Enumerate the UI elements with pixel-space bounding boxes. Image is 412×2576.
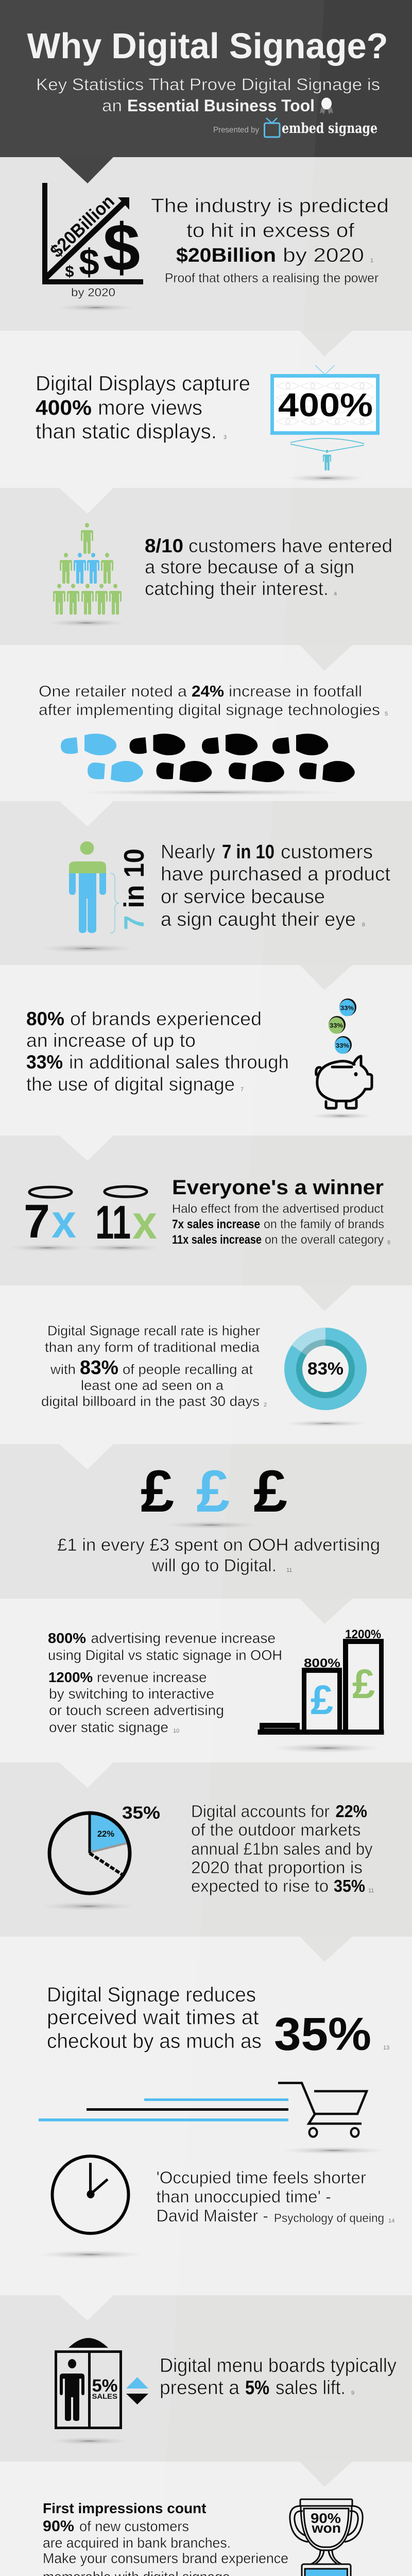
icon: trophy 90 percent won: [290, 2499, 363, 2576]
stat text: or touch screen advertising: [49, 1702, 224, 1718]
icon: 7x with halo: [24, 1187, 76, 1248]
footnote: 6: [362, 922, 365, 928]
icon: people pyramid: [53, 523, 122, 615]
icon: speeding shopping cart: [39, 2083, 367, 2137]
stat text: the use of digital signage: [26, 1074, 235, 1095]
stat text: 5%: [245, 2377, 269, 2399]
icon: 11x with halo: x: [132, 1196, 157, 1249]
icon: three pound signs: [141, 1459, 287, 1524]
bar chart: revenue increase: [258, 1628, 384, 1735]
stat text: with: [50, 1362, 76, 1377]
icon: three pound signs: £: [253, 1459, 287, 1524]
stat text: 83%: [80, 1357, 118, 1379]
forecast text: $20Billion: [176, 245, 276, 266]
halo text: 7x sales increase: [172, 1217, 260, 1231]
stat text: Digital Signage reduces: [47, 1984, 256, 2006]
stat text: or service because: [161, 886, 325, 908]
bar chart: revenue increase: £: [352, 1661, 375, 1707]
panel: 7 in 10 customers: [0, 801, 412, 965]
stat text: have purchased a product: [161, 863, 390, 885]
stat text: 8/10: [145, 535, 183, 556]
stat text: sales lift.: [276, 2377, 346, 2399]
icon: 7x with halo: 7: [24, 1195, 50, 1248]
panel: advertising revenue: [0, 1599, 412, 1762]
footnote: 14: [388, 2218, 394, 2224]
footnote: 9: [351, 2390, 354, 2396]
footnote: 11: [368, 1888, 374, 1894]
subtitle: an: [102, 96, 122, 115]
subtitle: Key Statistics That Prove Digital Signage is: [36, 75, 380, 94]
icon: coins: 33%: [340, 1005, 354, 1012]
forecast text: by 2020: [283, 245, 364, 266]
stat text: 2020 that proportion is: [191, 1858, 363, 1877]
bar chart: revenue increase: 1200%: [345, 1628, 381, 1641]
panel: header: [0, 0, 412, 157]
footnote: 4: [334, 591, 337, 597]
footnote: 13: [383, 2045, 389, 2051]
icon: screen with eyes: [270, 365, 380, 435]
heading: Everyone's a winner: [172, 1176, 384, 1199]
icon: trophy 90 percent won: 90%: [311, 2511, 341, 2526]
stat text: Nearly: [161, 841, 215, 863]
panel: menu boards: [0, 2295, 412, 2462]
stat text: Digital accounts for: [191, 1802, 330, 1821]
panel: 8 of 10 customers: [0, 488, 412, 645]
footnote: 7: [241, 1087, 244, 1093]
stat text: of brands experienced: [70, 1008, 262, 1029]
stat text: increase in footfall: [229, 682, 362, 700]
icon: three pound signs: £: [141, 1459, 174, 1524]
icon: growth chart with dollars: $: [65, 262, 74, 280]
panel: recall rate: [0, 1285, 412, 1444]
panel: 400 percent views: [0, 331, 412, 488]
quote: David Maister -: [157, 2206, 268, 2225]
stat text: 1200%: [48, 1669, 93, 1685]
icon: 7x with halo: x: [52, 1195, 76, 1248]
quote: 'Occupied time feels shorter: [157, 2168, 366, 2187]
halo text: on the overall category: [265, 1233, 384, 1247]
stat text: an increase of up to: [26, 1030, 196, 1051]
icon: lift with 5 percent: [56, 2338, 148, 2428]
stat text: by switching to interactive: [49, 1686, 214, 1702]
stat text: customers have entered: [188, 535, 392, 556]
stat text: least one ad seen on a: [81, 1378, 224, 1393]
footnote: 11: [286, 1567, 292, 1573]
stat text: perceived wait times at: [47, 2006, 259, 2029]
stat text: Digital Signage recall rate is higher: [47, 1323, 260, 1338]
stat text: 22%: [336, 1802, 367, 1821]
stat text: of new customers: [79, 2518, 189, 2534]
panel: outdoor market share: [0, 1762, 412, 1937]
icon: viewer sightlines: [290, 438, 364, 470]
stat text: Digital Displays capture: [36, 371, 250, 395]
icon: award ribbon: [320, 98, 333, 114]
icon: growth chart with dollars: $: [79, 242, 99, 283]
stat text: 33%: [26, 1052, 63, 1073]
stat text: present a: [160, 2377, 240, 2399]
stat text: 400%: [36, 396, 92, 419]
subtitle: Essential Business Tool: [127, 96, 315, 115]
icon: piggy bank: [316, 1056, 372, 1108]
stat text: customers: [281, 841, 373, 863]
quote: than unoccupied time' -: [157, 2187, 331, 2206]
stat text: 800%: [48, 1630, 86, 1646]
presented by: Presented by: [213, 126, 259, 134]
stat text: £1 in every £3 spent on OOH advertising: [57, 1535, 380, 1555]
stat text: revenue increase: [97, 1669, 207, 1685]
stat text: a sign caught their eye: [161, 909, 356, 930]
stat text: over static signage: [49, 1719, 168, 1735]
panel: footfall: [0, 645, 412, 801]
bar chart: revenue increase: 800%: [304, 1656, 340, 1670]
icon: three pound signs: £: [196, 1459, 230, 1524]
vertical 7 in 10 label: 7 in 10: [118, 849, 150, 930]
icon: 11x with halo: 11: [95, 1196, 131, 1249]
supporting line: Proof that others a realising the power: [165, 271, 379, 285]
stat text: Digital menu boards typically: [160, 2355, 397, 2377]
stat text: catching their interest.: [145, 578, 329, 599]
donut chart: 83 percent: 83%: [307, 1359, 344, 1379]
footnote: 1: [370, 258, 373, 264]
stat text: digital billboard in the past 30 days: [41, 1394, 260, 1409]
stat text: in additional sales through: [69, 1052, 289, 1073]
stat text: will go to Digital.: [151, 1556, 277, 1575]
logo wordmark: embed signage: [282, 121, 377, 137]
panel: halo effect: [0, 1136, 412, 1285]
icon: embed signage tv logo: [265, 118, 280, 137]
icon: lift with 5 percent: SALES: [92, 2392, 117, 2400]
stat text: after implementing digital signage technologies: [39, 701, 380, 719]
icon: clock: [53, 2156, 129, 2233]
stat text: checkout by as much as: [47, 2030, 262, 2053]
stat text: annual £1bn sales and by: [191, 1839, 373, 1858]
stat text: 24%: [192, 682, 224, 700]
stat text: using Digital vs static signage in OOH: [48, 1647, 282, 1663]
icon: growth chart with dollars: $: [103, 210, 140, 285]
icon: growth chart with dollars: $20Billion: [46, 191, 118, 262]
footnote: 2: [264, 1402, 267, 1408]
stat text: than static displays.: [36, 419, 217, 443]
halo text: on the family of brands: [264, 1217, 384, 1231]
bar chart: revenue increase: £: [311, 1677, 333, 1723]
pie chart: 22 to 35 percent: 22%: [97, 1829, 114, 1839]
panel: first impressions: [0, 2462, 412, 2576]
footnote: 8: [387, 1240, 390, 1246]
stat text: One retailer noted a: [39, 682, 187, 700]
pie chart: 22 to 35 percent: [49, 1803, 160, 1893]
heading: First impressions count: [43, 2500, 206, 2516]
icon: footprints: [61, 734, 355, 782]
icon: coins: [329, 998, 356, 1054]
stat text: of people recalling at: [123, 1362, 253, 1377]
icon: trophy 90 percent won: won: [311, 2520, 341, 2536]
footnote: 3: [224, 434, 227, 440]
title: Why Digital Signage?: [27, 26, 388, 66]
stat text: 90%: [43, 2518, 74, 2535]
stat text: a store because of a sign: [145, 556, 354, 578]
stat text: more views: [98, 396, 202, 419]
icon: coins: 33%: [336, 1042, 349, 1049]
panel: wait times: [0, 1937, 412, 2295]
stat text: expected to rise to: [191, 1876, 329, 1895]
stat text: 35%: [334, 1876, 365, 1895]
stat text: advertising revenue increase: [91, 1630, 276, 1646]
icon: growth chart with dollars: by 2020: [71, 286, 115, 299]
pie chart: 22 to 35 percent: 35%: [122, 1803, 160, 1823]
quote: Psychology of queing: [274, 2211, 384, 2225]
stat text: 7 in 10: [222, 841, 274, 863]
stat text: are acquired in bank branches.: [43, 2535, 231, 2551]
big 35 percent: 35%: [274, 2009, 371, 2060]
halo text: 11x sales increase: [172, 1233, 262, 1247]
icon: coins: 33%: [330, 1022, 343, 1029]
panel: brands sales uplift: [0, 965, 412, 1136]
stat text: of the outdoor markets: [191, 1820, 360, 1839]
icon: 11x with halo: [95, 1187, 157, 1249]
panel: OOH spend: [0, 1444, 412, 1599]
stat text: Make your consumers brand experience: [43, 2550, 288, 2566]
stat text: than any form of traditional media: [45, 1340, 260, 1355]
icon: screen with eyes: 400%: [278, 386, 373, 423]
icon: person split by colour: [69, 841, 119, 933]
forecast text: to hit in excess of: [186, 220, 354, 242]
stat text: 80%: [26, 1008, 64, 1029]
footnote: 5: [385, 711, 388, 717]
halo text: Halo effect from the advertised product: [172, 1202, 384, 1216]
icon: growth chart with dollars: [42, 183, 143, 299]
icon: lift with 5 percent: 5%: [92, 2376, 117, 2396]
panel: industry forecast: [0, 157, 412, 331]
donut chart: 83 percent: [284, 1328, 367, 1410]
footnote: 10: [173, 1728, 179, 1734]
forecast text: The industry is predicted: [151, 195, 389, 217]
